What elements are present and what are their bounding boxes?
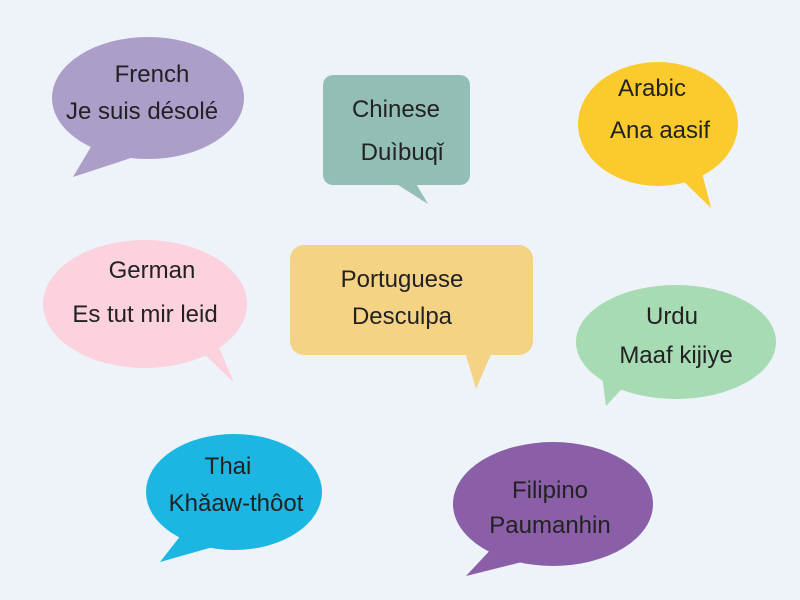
bubble: Urdu: Urdu bbox=[646, 303, 698, 330]
bubble: Arabic bbox=[578, 62, 738, 208]
bubble: Chinese bbox=[323, 75, 470, 204]
bubble: Filipino bbox=[453, 442, 653, 576]
bubble: French: Je suis désolé bbox=[66, 98, 218, 125]
bubble: Chinese: Chinese bbox=[352, 96, 440, 123]
bubble: Portuguese bbox=[290, 245, 533, 389]
bubble: Thai: Thai bbox=[205, 453, 251, 480]
bubble: Thai: Khǎaw-thôot bbox=[169, 490, 304, 517]
bubble: Filipino: Paumanhin bbox=[489, 512, 611, 539]
bubble: Thai bbox=[146, 434, 322, 562]
bubble: Portuguese: Portuguese bbox=[341, 266, 463, 293]
bubble: Filipino: Filipino bbox=[512, 477, 588, 504]
bubble: French: French bbox=[115, 61, 189, 88]
bubble: German: German bbox=[109, 257, 195, 284]
bubble: Arabic: Ana aasif bbox=[610, 117, 710, 144]
bubble: German: Es tut mir leid bbox=[72, 301, 218, 328]
bubble: French bbox=[52, 37, 244, 177]
bubble: Urdu: Maaf kijiye bbox=[619, 342, 733, 369]
bubble: Portuguese: Desculpa bbox=[352, 303, 453, 330]
bubble: Urdu bbox=[576, 285, 776, 406]
bubble: German bbox=[43, 240, 247, 383]
bubble: Chinese: Duìbuqǐ bbox=[361, 139, 445, 166]
bubble: Arabic: Arabic bbox=[618, 75, 686, 102]
